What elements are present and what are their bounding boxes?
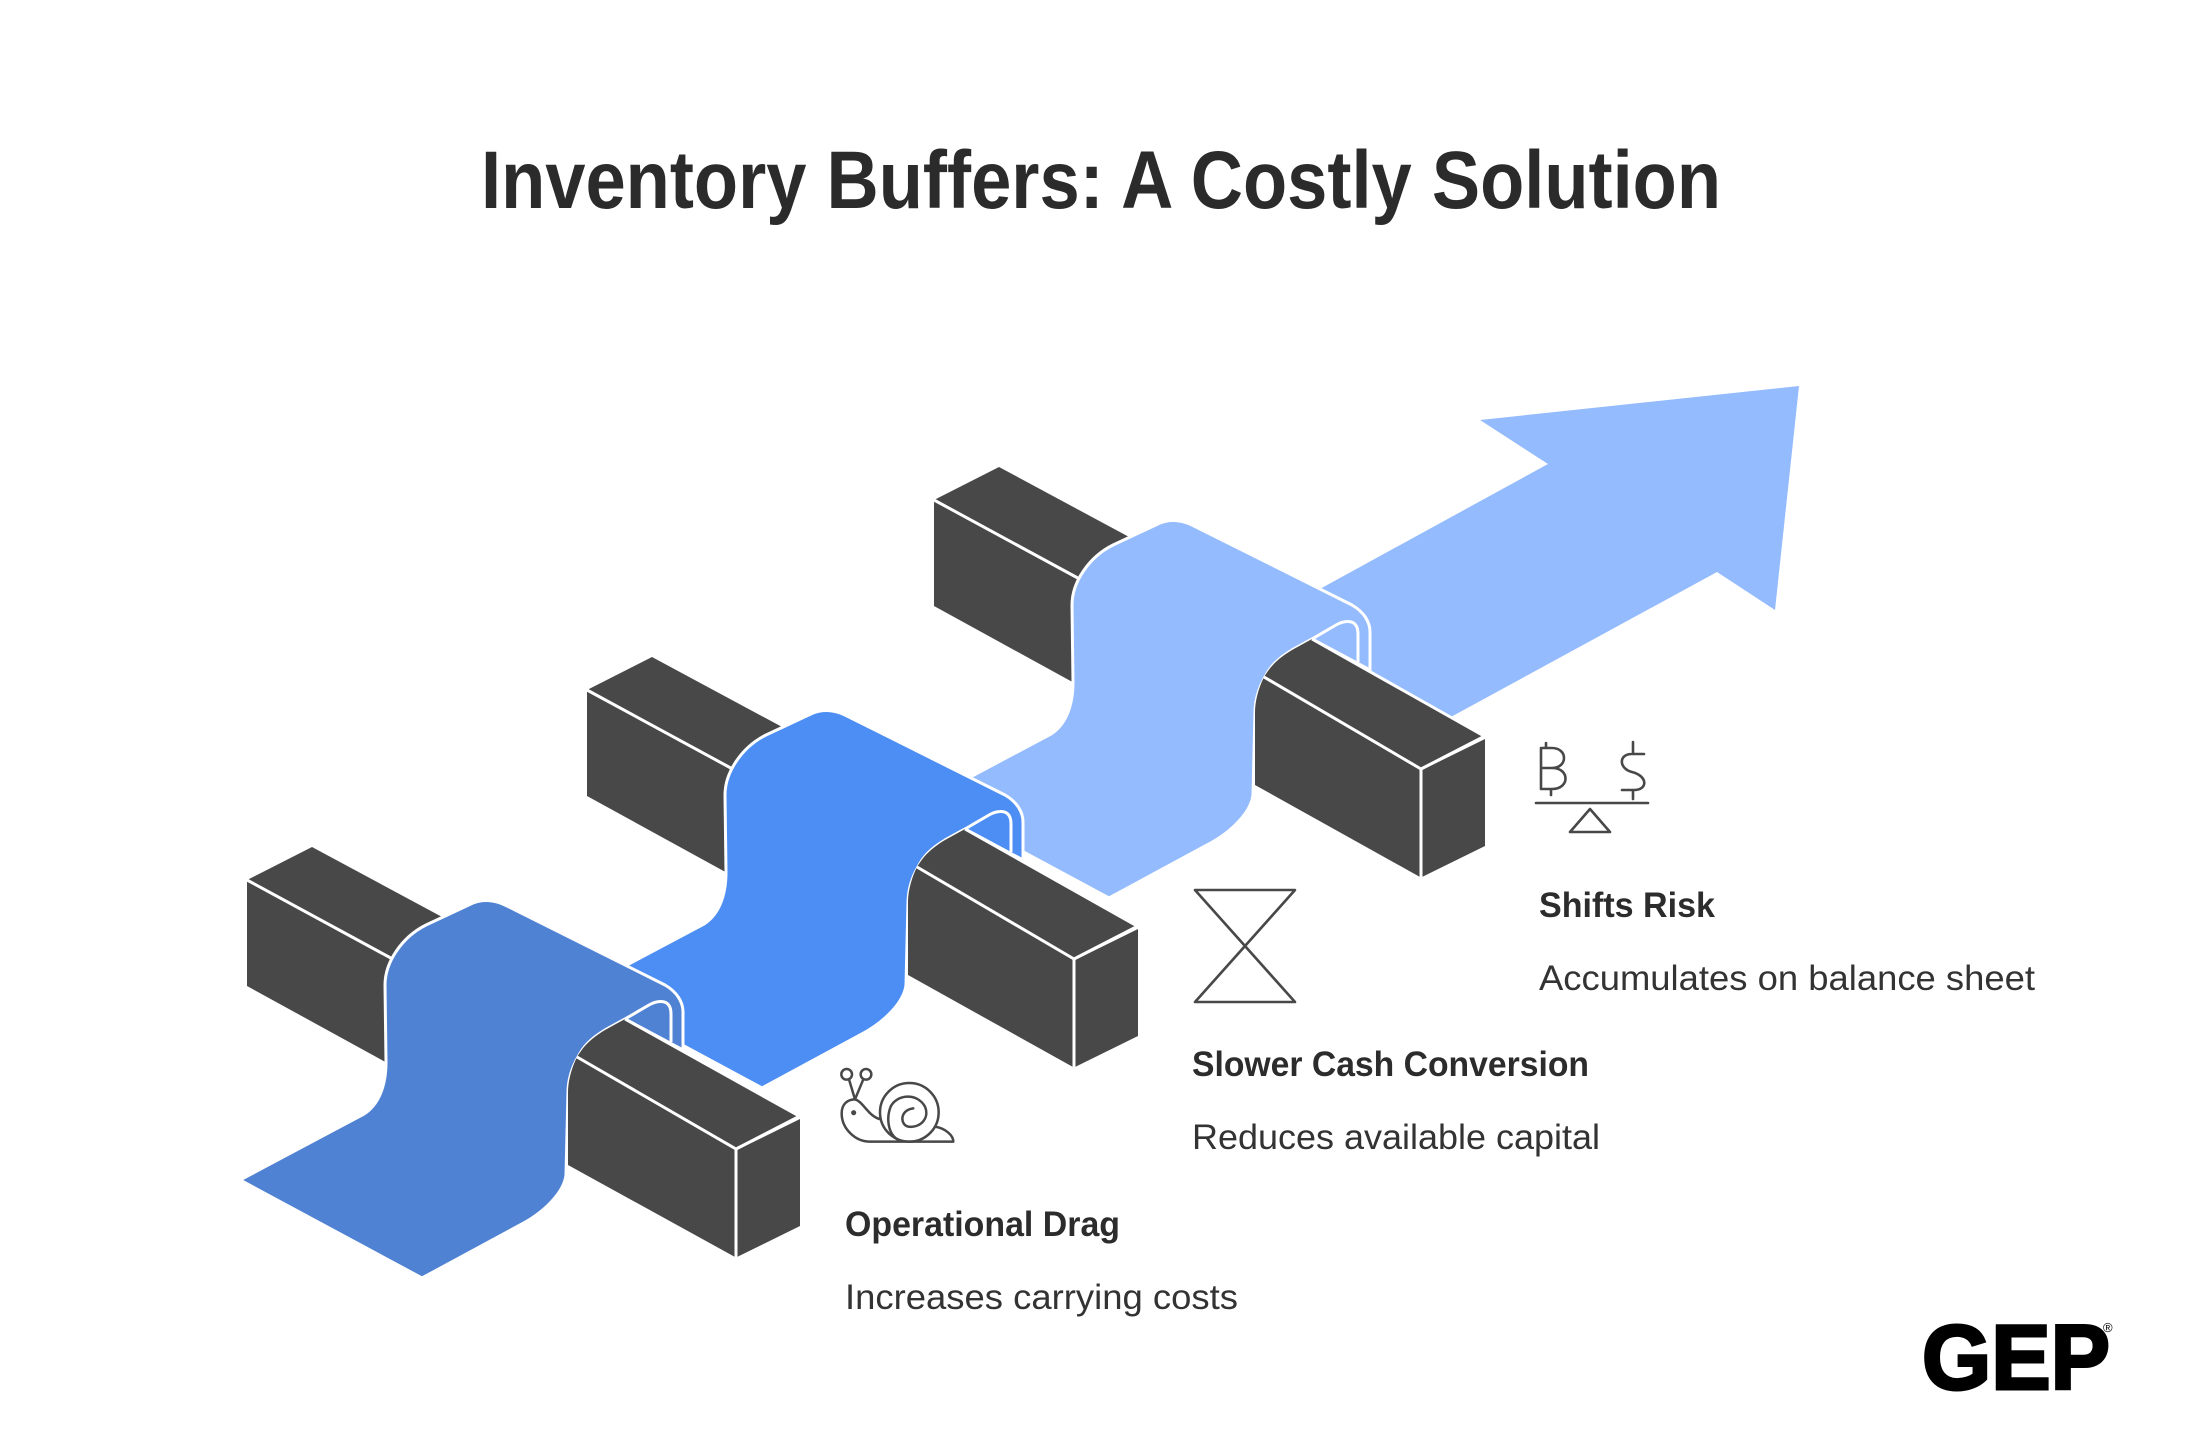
text: operational drag bbox=[845, 1205, 1238, 1317]
icon: balance scale with baht and dollar bbox=[1536, 742, 1648, 832]
text: operational drag: Operational Drag bbox=[845, 1205, 1120, 1244]
barrier 3: light blue ribbon over dark block bbox=[927, 467, 1485, 898]
text: slower cash conversion: Slower Cash Conversion bbox=[1192, 1045, 1589, 1084]
text: shifts risk: Shifts Risk bbox=[1539, 886, 1716, 925]
barrier 2: mid blue ribbon over dark block bbox=[580, 657, 1138, 1088]
text: operational drag: Increases carrying costs bbox=[845, 1278, 1238, 1317]
text: shifts risk bbox=[1539, 886, 2035, 998]
barrier 1: steel blue ribbon over dark block bbox=[240, 847, 800, 1278]
icon: hourglass bbox=[1195, 890, 1295, 1002]
text: slower cash conversion: Reduces available capital bbox=[1192, 1118, 1600, 1157]
logo: GEP: GEP bbox=[1922, 1307, 2110, 1409]
logo: GEP: ® bbox=[2103, 1320, 2113, 1335]
icon: snail bbox=[841, 1069, 953, 1142]
text: shifts risk: Accumulates on balance sheet bbox=[1539, 959, 2035, 998]
title: Inventory Buffers: A Costly Solution bbox=[481, 135, 1721, 226]
arrow: rising light blue arrow bbox=[1300, 386, 1799, 718]
text: slower cash conversion bbox=[1192, 1045, 1600, 1157]
